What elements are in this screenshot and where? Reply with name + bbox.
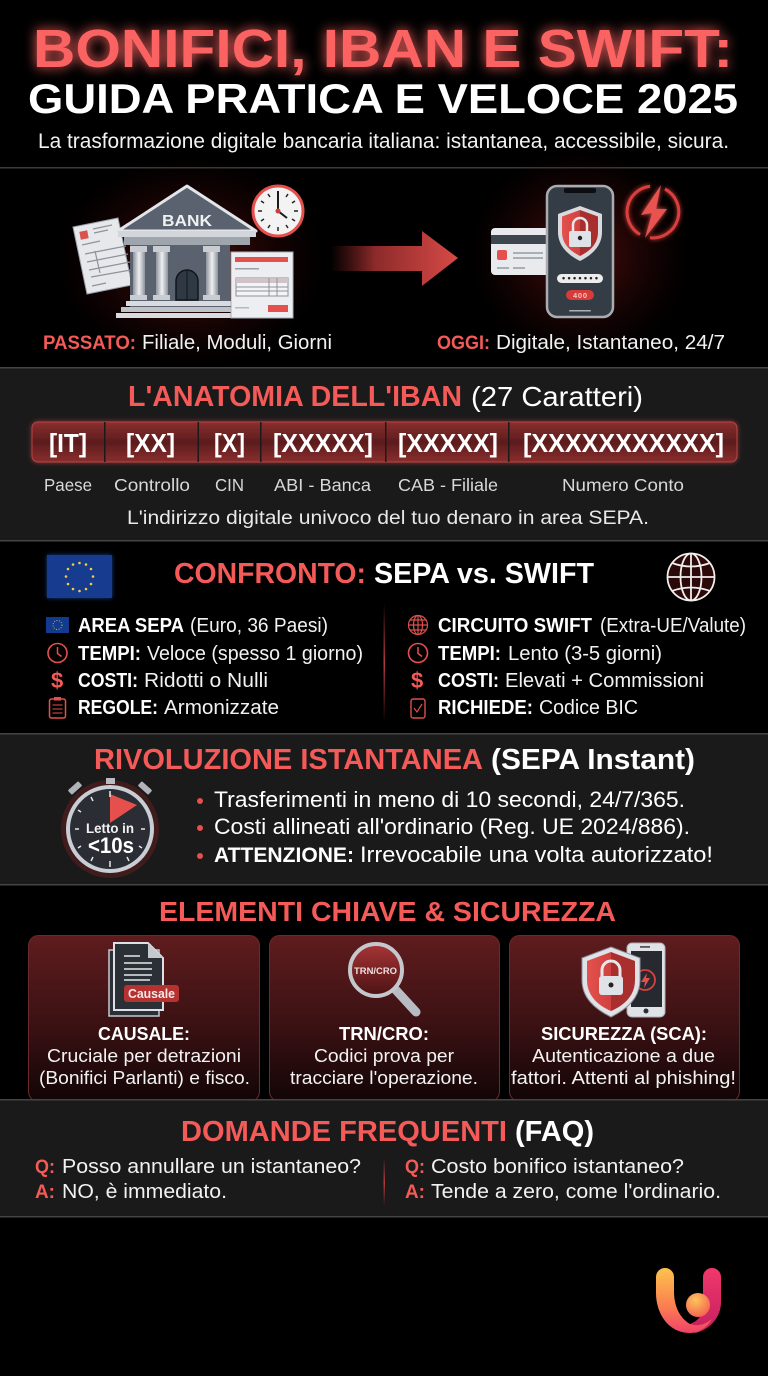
faq left: NO, è immediato. [62,1181,227,1203]
title [28,19,738,122]
icon: smartphone with shield [547,186,613,317]
icon: bank form [231,252,293,318]
iban part labels [44,475,684,495]
icon: magnifier [350,944,416,1012]
icon: stopwatch: <10s [88,833,134,858]
iban code bar: [XX] [126,428,175,458]
bullet list: instant: Trasferimenti in meno di 10 secondi, 24/7/365. [214,787,685,812]
row: costi sepa: Ridotti o Nulli [144,670,268,692]
row: circuito swift [408,615,746,637]
icon: globe [668,554,714,600]
card: causale: (Bonifici Parlanti) e fisco. [39,1067,250,1088]
card: causale: CAUSALE: [98,1023,190,1044]
row: tempi swift: Lento (3-5 giorni) [508,643,662,665]
row: richiede: RICHIEDE: [438,697,533,719]
row: costi swift: $ [411,668,423,693]
bullet list: instant: Costi allineati all'ordinario (Reg. UE 2024/886). [214,814,690,839]
panel: rivoluzione istantanea [0,733,768,885]
panel: faq [0,1099,768,1218]
iban code bar: [X] [214,428,245,458]
list: sepa [46,615,363,719]
icon: lightning bolt [627,185,679,238]
card: sicurezza sca: Autenticazione a due [532,1045,715,1066]
bullet list: instant [197,787,713,867]
row: area sepa: AREA SEPA [78,615,184,637]
card: sicurezza sca: fattori. Attenti al phishing! [511,1067,736,1088]
faq left: Posso annullare un istantaneo? [62,1156,361,1178]
card: causale [28,936,260,1102]
icon: document: Causale [128,987,175,1001]
icon: eu flag [47,555,112,598]
iban part labels: Paese [44,475,92,495]
subtitle: La trasformazione digitale bancaria italiana: istantanea, accessibile, sicura. [38,130,729,153]
heading: rivoluzione: (SEPA Instant) [491,744,695,776]
iban note: L'indirizzo digitale univoco del tuo denaro in area SEPA. [127,507,649,529]
icon: bank building [116,186,256,318]
row: tempi sepa: Veloce (spesso 1 giorno) [147,643,363,665]
iban part labels: ABI - Banca [274,475,371,495]
row: richiede [411,697,638,719]
faq right: A: [405,1181,425,1203]
card: sicurezza sca [510,936,740,1102]
heading: rivoluzione: RIVOLUZIONE ISTANTANEA [94,744,483,776]
row: regole sepa: REGOLE: [78,697,158,719]
faq right: Tende a zero, come l'ordinario. [431,1181,721,1203]
faq right: Costo bonifico istantaneo? [431,1156,684,1178]
card: trn cro: Codici prova per [314,1045,454,1066]
card: sicurezza sca: SICUREZZA (SCA): [541,1023,707,1044]
panel: passato e oggi [0,150,768,367]
heading: confronto: CONFRONTO: [174,558,366,590]
arrow [330,231,458,286]
faq right: Q: [405,1156,425,1178]
row: costi sepa: COSTI: [78,670,138,692]
iban code bar: [XXXXX] [398,428,498,458]
iban code bar [32,422,737,462]
row: costi swift: COSTI: [438,670,499,692]
bullet list: instant: Irrevocabile una volta autorizzato! [360,842,713,867]
row: tempi swift [408,643,662,665]
row: regole sepa: Armonizzate [164,697,279,719]
icon: shield and phone [582,943,665,1017]
row: circuito swift: CIRCUITO SWIFT [438,615,592,637]
list: swift [408,615,746,719]
iban part labels: Controllo [114,475,190,495]
iban part labels: CAB - Filiale [398,475,498,495]
row: costi swift: Elevati + Commissioni [505,670,704,692]
bullet list: instant: ATTENZIONE: [214,844,354,867]
heading: iban [128,381,643,413]
row: costi swift [411,668,704,693]
row: tempi sepa [48,643,363,665]
label: oggi: OGGI: [437,333,490,354]
iban code bar: [XXXXX] [273,428,373,458]
heading: iban: (27 Caratteri) [471,381,643,412]
icon: smartphone with shield: 400 [573,291,587,300]
logo [656,1268,721,1333]
heading: confronto [174,558,594,590]
iban part labels: CIN [215,475,244,495]
heading: faq: DOMANDE FREQUENTI [181,1116,507,1148]
icon: document [109,943,179,1016]
label: passato [43,332,332,354]
icon: payment card [491,228,551,275]
faq left [35,1156,361,1203]
heading: elementi chiave: ELEMENTI CHIAVE & SICUREZZA [159,896,616,927]
panel: elementi chiave e sicurezza [0,884,768,1102]
heading: rivoluzione [94,744,695,776]
row: tempi sepa: TEMPI: [78,643,141,665]
icon: stopwatch [61,778,159,878]
title: BONIFICI, IBAN E SWIFT: [33,19,733,79]
label: passato: Filiale, Moduli, Giorni [142,332,332,354]
card: trn cro: TRN/CRO: [339,1023,429,1044]
row: richiede: Codice BIC [539,697,638,719]
icon: stopwatch: Letto in [86,820,134,836]
faq left: A: [35,1181,55,1203]
row: regole sepa [50,697,279,719]
label: passato: PASSATO: [43,333,136,354]
row: area sepa: (Euro, 36 Paesi) [190,615,328,637]
row: area sepa [46,615,328,637]
card: causale: Cruciale per detrazioni [47,1045,241,1066]
icon: old paper form [73,218,132,294]
faq right [405,1156,721,1203]
iban code bar: [IT] [49,428,87,458]
card: trn cro [270,936,500,1102]
heading: confronto: SEPA vs. SWIFT [374,558,594,590]
label: oggi: Digitale, Istantaneo, 24/7 [496,332,725,354]
row: costi sepa [51,668,268,693]
title: GUIDA PRATICA E VELOCE 2025 [28,75,738,122]
icon: magnifier: TRN/CRO [354,966,397,977]
card: trn cro: tracciare l'operazione. [290,1067,478,1088]
row: circuito swift: (Extra-UE/Valute) [600,615,746,637]
iban part labels: Numero Conto [562,475,684,495]
row: costi sepa: $ [51,668,63,693]
heading: iban: L'ANATOMIA DELL'IBAN [128,381,462,413]
iban code bar: [XXXXXXXXXXX] [523,428,724,458]
icon: smartphone with shield: ••••••• [562,273,598,283]
panel: anatomia dell'iban [0,367,768,541]
row: tempi swift: TEMPI: [438,643,501,665]
panel: confronto sepa swift [0,540,768,722]
icon: bank building: BANK [162,213,213,230]
faq left: Q: [35,1156,55,1178]
heading: faq: (FAQ) [515,1116,594,1148]
icon: clock [253,186,303,236]
